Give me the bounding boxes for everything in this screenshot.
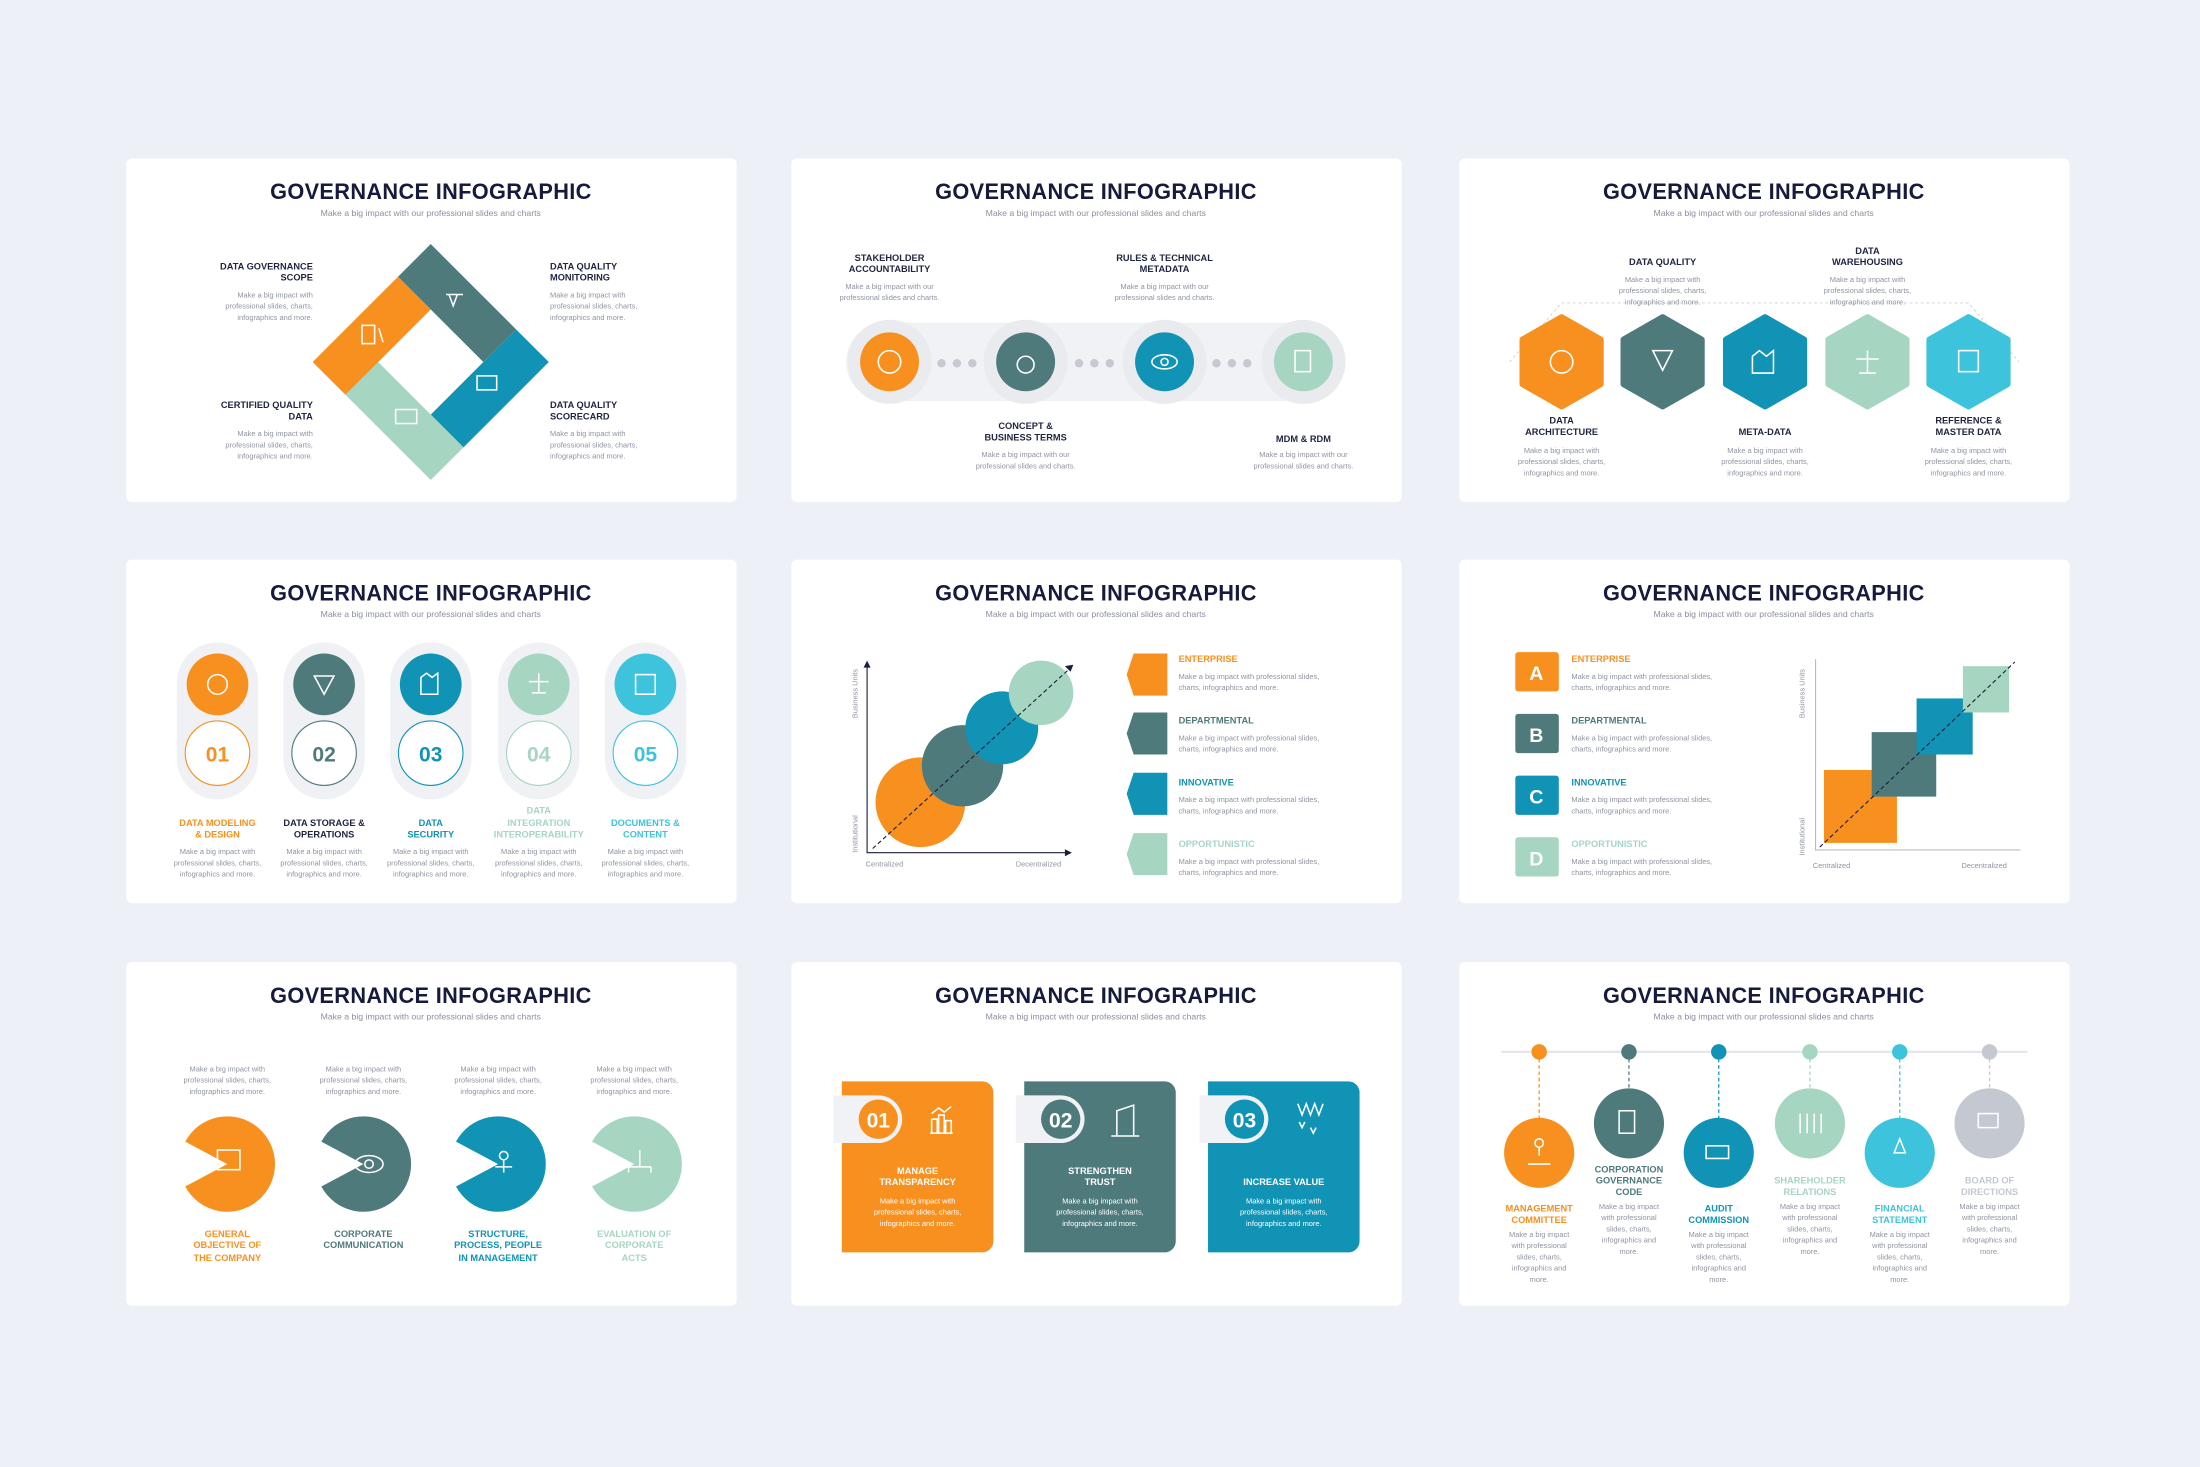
labels right: professional slides, charts, bbox=[550, 440, 637, 449]
chart: Centralized bbox=[866, 860, 903, 869]
labels: more. bbox=[1619, 1247, 1638, 1256]
panel: three cards bbox=[791, 962, 1402, 1306]
body texts bbox=[184, 1065, 678, 1096]
labels left: CERTIFIED QUALITY bbox=[221, 400, 314, 410]
labels: slides, charts, bbox=[1516, 1252, 1562, 1261]
labels: BUSINESS TERMS bbox=[985, 432, 1067, 442]
title: GOVERNANCE INFOGRAPHIC bbox=[270, 580, 592, 605]
labels: Make a big impact with bbox=[1625, 275, 1700, 284]
body texts: professional slides, charts, bbox=[454, 1076, 542, 1085]
labels right: Make a big impact with bbox=[550, 290, 626, 299]
subtitle: Make a big impact with our professional slides and charts bbox=[1654, 1012, 1874, 1022]
letter list: Make a big impact with professional slides, bbox=[1571, 795, 1712, 804]
letter list bbox=[1515, 652, 1712, 877]
labels: Make a big impact bbox=[1870, 1230, 1930, 1239]
labels: DOCUMENTS & bbox=[611, 818, 680, 828]
labels: IN MANAGEMENT bbox=[459, 1253, 538, 1263]
letter list: A bbox=[1529, 663, 1543, 685]
legend list: charts, infographics and more. bbox=[1179, 806, 1278, 815]
labels: with professional bbox=[1871, 1241, 1928, 1250]
labels: DATA bbox=[419, 818, 443, 828]
body texts: Make a big impact with bbox=[596, 1065, 672, 1073]
labels: CORPORATION bbox=[1595, 1164, 1664, 1174]
labels: professional slides and charts. bbox=[976, 461, 1076, 470]
letter list: INNOVATIVE bbox=[1571, 777, 1627, 787]
letter list: Make a big impact with professional slides, bbox=[1571, 672, 1712, 681]
pills: 04 bbox=[527, 744, 551, 767]
labels left: Make a big impact with bbox=[237, 429, 313, 438]
labels: with professional bbox=[1781, 1213, 1838, 1222]
card 02: professional slides, charts, bbox=[1056, 1208, 1144, 1217]
body texts: professional slides, charts, bbox=[184, 1076, 271, 1085]
labels: METADATA bbox=[1140, 264, 1190, 274]
subtitle: Make a big impact with our professional slides and charts bbox=[986, 1012, 1207, 1022]
card 01: MANAGE bbox=[897, 1166, 938, 1176]
pills: 03 bbox=[419, 744, 442, 767]
labels: Make a big impact with bbox=[1524, 446, 1599, 455]
hexagon row bbox=[1510, 303, 2019, 407]
letter list: charts, infographics and more. bbox=[1571, 683, 1671, 692]
card 02: Make a big impact with bbox=[1062, 1196, 1138, 1205]
labels: Make a big impact with bbox=[501, 847, 577, 856]
title: GOVERNANCE INFOGRAPHIC bbox=[1603, 179, 1925, 204]
title: GOVERNANCE INFOGRAPHIC bbox=[270, 179, 592, 204]
labels: STRUCTURE, bbox=[468, 1229, 528, 1239]
labels: Make a big impact with bbox=[286, 847, 362, 856]
labels: infographics and more. bbox=[1830, 297, 1905, 306]
labels: infographics and bbox=[1962, 1236, 2017, 1245]
labels: COMMUNICATION bbox=[323, 1240, 404, 1250]
letter list: D bbox=[1529, 848, 1543, 870]
labels: slides, charts, bbox=[1696, 1252, 1741, 1261]
labels right: Make a big impact with bbox=[550, 429, 626, 438]
labels: infographics and more. bbox=[180, 870, 255, 879]
labels: INTEROPERABILITY bbox=[494, 829, 585, 839]
body texts: professional slides, charts, bbox=[590, 1076, 678, 1085]
card 03: Make a big impact with bbox=[1246, 1196, 1322, 1205]
labels: FINANCIAL bbox=[1875, 1204, 1925, 1214]
body texts: Make a big impact with bbox=[326, 1065, 401, 1073]
panel: lettered squares chart bbox=[1459, 560, 2070, 903]
labels: DATA bbox=[527, 805, 551, 815]
labels: AUDIT bbox=[1705, 1204, 1733, 1214]
circles bbox=[185, 1116, 682, 1212]
labels: RULES & TECHNICAL bbox=[1116, 253, 1213, 263]
card 03: INCREASE VALUE bbox=[1243, 1177, 1324, 1187]
labels left: infographics and more. bbox=[237, 313, 313, 322]
legend list: charts, infographics and more. bbox=[1179, 683, 1278, 692]
labels: DATA MODELING bbox=[179, 818, 256, 828]
labels right: infographics and more. bbox=[550, 313, 626, 322]
labels bbox=[193, 1229, 672, 1263]
labels: CORPORATE bbox=[334, 1229, 393, 1239]
panel: timeline bbox=[1459, 962, 2070, 1306]
labels: MASTER DATA bbox=[1936, 427, 2002, 437]
labels: Make a big impact with bbox=[1830, 275, 1905, 284]
labels left: professional slides, charts, bbox=[225, 440, 313, 449]
labels: slides, charts, bbox=[1606, 1224, 1652, 1233]
labels: professional slides, charts, bbox=[1619, 286, 1706, 295]
labels: Make a big impact with our bbox=[845, 282, 934, 291]
labels: infographics and more. bbox=[1625, 297, 1700, 306]
letter list: charts, infographics and more. bbox=[1571, 806, 1671, 815]
labels: professional slides and charts. bbox=[840, 293, 939, 302]
labels: DATA bbox=[1855, 246, 1880, 256]
labels: META-DATA bbox=[1739, 427, 1792, 437]
labels: COMMITTEE bbox=[1511, 1215, 1567, 1225]
step squares chart bbox=[1797, 659, 2020, 870]
labels left: DATA bbox=[289, 411, 313, 421]
labels bbox=[1505, 1164, 2020, 1284]
labels: Make a big impact with our bbox=[981, 450, 1070, 459]
chart: Institutional bbox=[850, 815, 859, 853]
letter list: Make a big impact with professional slides, bbox=[1571, 734, 1712, 743]
title: GOVERNANCE INFOGRAPHIC bbox=[1603, 580, 1925, 605]
labels bbox=[1518, 246, 2012, 477]
labels: infographics and bbox=[1783, 1236, 1837, 1245]
labels: Make a big impact with bbox=[180, 847, 255, 856]
labels: slides, charts, bbox=[1967, 1224, 2012, 1233]
card 02 bbox=[1016, 1081, 1176, 1252]
labels: professional slides, charts, bbox=[280, 858, 368, 867]
subtitle: Make a big impact with our professional slides and charts bbox=[321, 1012, 542, 1022]
labels right bbox=[550, 261, 637, 461]
labels: with professional bbox=[1690, 1241, 1747, 1250]
letter list: C bbox=[1529, 787, 1543, 809]
subtitle: Make a big impact with our professional slides and charts bbox=[321, 208, 542, 218]
body texts: infographics and more. bbox=[190, 1087, 265, 1096]
labels: Make a big impact bbox=[1689, 1230, 1749, 1239]
labels right: infographics and more. bbox=[550, 452, 626, 461]
labels: Make a big impact bbox=[1599, 1202, 1659, 1211]
title: GOVERNANCE INFOGRAPHIC bbox=[270, 983, 592, 1008]
labels: infographics and bbox=[1512, 1264, 1566, 1273]
body texts: infographics and more. bbox=[326, 1087, 401, 1096]
body texts: infographics and more. bbox=[460, 1087, 536, 1096]
letter list: B bbox=[1529, 725, 1543, 747]
labels: infographics and bbox=[1602, 1236, 1656, 1245]
labels: STATEMENT bbox=[1872, 1215, 1928, 1225]
subtitle: Make a big impact with our professional slides and charts bbox=[1654, 208, 1874, 218]
labels: Make a big impact with bbox=[1931, 446, 2006, 455]
step squares chart: Institutional bbox=[1797, 818, 1806, 856]
labels: RELATIONS bbox=[1784, 1187, 1836, 1197]
card 02: STRENGTHEN bbox=[1068, 1166, 1132, 1176]
labels right: DATA QUALITY bbox=[550, 400, 618, 410]
card 01 bbox=[833, 1081, 993, 1252]
labels: EVALUATION OF bbox=[597, 1229, 672, 1239]
labels: DATA QUALITY bbox=[1629, 257, 1697, 267]
card 03: infographics and more. bbox=[1246, 1219, 1322, 1228]
subtitle: Make a big impact with our professional slides and charts bbox=[986, 208, 1207, 218]
letter list: DEPARTMENTAL bbox=[1571, 716, 1647, 726]
icons in diamond bbox=[362, 295, 497, 424]
letter list: charts, infographics and more. bbox=[1571, 868, 1671, 877]
panel: circle track bbox=[791, 158, 1402, 502]
legend list: Make a big impact with professional slides, bbox=[1179, 795, 1319, 804]
legend list: charts, infographics and more. bbox=[1179, 745, 1278, 754]
legend list: INNOVATIVE bbox=[1179, 777, 1234, 787]
labels: COMMISSION bbox=[1688, 1215, 1749, 1225]
card 03: professional slides, charts, bbox=[1240, 1208, 1328, 1217]
labels: BOARD OF bbox=[1965, 1176, 2015, 1186]
labels: with professional bbox=[1511, 1241, 1567, 1250]
card 01: TRANSPARENCY bbox=[879, 1177, 957, 1187]
labels: DATA STORAGE & bbox=[283, 818, 365, 828]
card 02: TRUST bbox=[1085, 1177, 1116, 1187]
labels: Make a big impact with our bbox=[1259, 450, 1348, 459]
title: GOVERNANCE INFOGRAPHIC bbox=[935, 179, 1257, 204]
labels: WAREHOUSING bbox=[1832, 257, 1903, 267]
labels: Make a big impact with bbox=[1727, 446, 1803, 455]
labels: Make a big impact with bbox=[608, 847, 683, 856]
body texts: infographics and more. bbox=[596, 1087, 672, 1096]
labels bbox=[174, 805, 689, 879]
labels: professional slides, charts, bbox=[495, 858, 583, 867]
card 02: 02 bbox=[1049, 1110, 1072, 1133]
labels right: professional slides, charts, bbox=[550, 302, 637, 311]
diamond chart bbox=[313, 244, 549, 480]
labels left: infographics and more. bbox=[237, 452, 313, 461]
labels: infographics and bbox=[1873, 1264, 1927, 1273]
labels: professional slides, charts, bbox=[174, 858, 261, 867]
labels: infographics and bbox=[1692, 1264, 1746, 1273]
subtitle: Make a big impact with our professional slides and charts bbox=[986, 609, 1207, 619]
legend list: Make a big impact with professional slides, bbox=[1179, 672, 1319, 681]
legend list: ENTERPRISE bbox=[1179, 654, 1238, 664]
labels right: DATA QUALITY bbox=[550, 261, 618, 271]
labels: MDM & RDM bbox=[1276, 434, 1331, 444]
labels: ARCHITECTURE bbox=[1525, 427, 1598, 437]
card 01: infographics and more. bbox=[880, 1219, 955, 1228]
labels: with professional bbox=[1961, 1213, 2018, 1222]
panel: numbered pills bbox=[126, 560, 737, 903]
labels: CODE bbox=[1616, 1187, 1642, 1197]
labels: professional slides, charts, bbox=[1721, 457, 1809, 466]
labels: with professional bbox=[1600, 1213, 1657, 1222]
pills: 02 bbox=[312, 744, 336, 767]
step squares chart: Decentralized bbox=[1961, 861, 2007, 870]
body texts: professional slides, charts, bbox=[320, 1076, 407, 1085]
card 01: Make a big impact with bbox=[880, 1196, 955, 1205]
letter list: ENTERPRISE bbox=[1571, 654, 1631, 664]
labels: ACTS bbox=[622, 1253, 647, 1263]
labels: Make a big impact bbox=[1780, 1202, 1840, 1211]
labels: INTEGRATION bbox=[507, 818, 571, 828]
legend list: DEPARTMENTAL bbox=[1179, 716, 1254, 726]
timeline bbox=[1501, 1044, 2027, 1188]
labels: DIRECTIONS bbox=[1961, 1187, 2018, 1197]
labels: SHAREHOLDER bbox=[1774, 1176, 1846, 1186]
letter list: OPPORTUNISTIC bbox=[1571, 839, 1648, 849]
pills: 05 bbox=[634, 744, 657, 767]
labels: GENERAL bbox=[205, 1229, 250, 1239]
pills bbox=[177, 642, 686, 799]
card 01: 01 bbox=[867, 1110, 890, 1133]
labels: DATA bbox=[1549, 416, 1574, 426]
labels: slides, charts, bbox=[1877, 1252, 1922, 1261]
labels: more. bbox=[1530, 1275, 1549, 1284]
legend list: OPPORTUNISTIC bbox=[1179, 839, 1255, 849]
labels left bbox=[220, 261, 314, 461]
labels: professional slides, charts, bbox=[1518, 457, 1605, 466]
labels: Make a big impact bbox=[1509, 1230, 1569, 1239]
letter list: Make a big impact with professional slides, bbox=[1571, 857, 1712, 866]
labels right: MONITORING bbox=[550, 272, 610, 282]
panel: hexagons bbox=[1459, 158, 2070, 502]
legend list: charts, infographics and more. bbox=[1179, 868, 1278, 877]
labels: OBJECTIVE OF bbox=[193, 1240, 262, 1250]
labels: infographics and more. bbox=[1524, 468, 1599, 477]
body texts: Make a big impact with bbox=[460, 1065, 536, 1073]
labels left: DATA GOVERNANCE bbox=[220, 261, 313, 271]
labels: infographics and more. bbox=[286, 870, 362, 879]
labels: professional slides and charts. bbox=[1115, 293, 1214, 302]
labels: professional slides, charts, bbox=[602, 858, 689, 867]
chart bbox=[850, 661, 1073, 869]
labels: infographics and more. bbox=[1931, 468, 2006, 477]
chart: Decentralized bbox=[1016, 860, 1061, 869]
labels: slides, charts, bbox=[1787, 1224, 1833, 1233]
labels: GOVERNANCE bbox=[1596, 1176, 1662, 1186]
labels: THE COMPANY bbox=[193, 1253, 262, 1263]
title: GOVERNANCE INFOGRAPHIC bbox=[1603, 983, 1925, 1008]
labels: infographics and more. bbox=[608, 870, 683, 879]
pills: 01 bbox=[206, 744, 229, 767]
labels: CONTENT bbox=[623, 829, 668, 839]
panel: overlapping circles chart bbox=[791, 560, 1402, 903]
panel: diamond pinwheel bbox=[126, 158, 737, 502]
legend list bbox=[1127, 654, 1319, 877]
labels: professional slides and charts. bbox=[1254, 461, 1353, 470]
labels: professional slides, charts, bbox=[1824, 286, 1911, 295]
card 01: professional slides, charts, bbox=[874, 1208, 961, 1217]
legend list: Make a big impact with professional slides, bbox=[1179, 734, 1319, 743]
labels: more. bbox=[1980, 1247, 1999, 1256]
letter list: charts, infographics and more. bbox=[1571, 745, 1671, 754]
labels left: professional slides, charts, bbox=[225, 302, 313, 311]
labels: PROCESS, PEOPLE bbox=[454, 1240, 542, 1250]
labels: CONCEPT & bbox=[998, 421, 1053, 431]
card 03 bbox=[1200, 1081, 1360, 1252]
card 03: 03 bbox=[1233, 1110, 1256, 1133]
labels: CORPORATE bbox=[605, 1240, 663, 1250]
step squares chart: Centralized bbox=[1813, 861, 1850, 870]
labels: infographics and more. bbox=[1727, 468, 1803, 477]
labels: SECURITY bbox=[407, 829, 455, 839]
labels: REFERENCE & bbox=[1935, 416, 2002, 426]
labels: Make a big impact with bbox=[393, 847, 468, 856]
panel: pacman circles bbox=[126, 962, 737, 1306]
labels: more. bbox=[1709, 1275, 1728, 1284]
labels left: Make a big impact with bbox=[237, 290, 313, 299]
labels left: SCOPE bbox=[280, 272, 313, 282]
labels: more. bbox=[1800, 1247, 1819, 1256]
labels: & DESIGN bbox=[195, 829, 240, 839]
step squares chart: Business Units bbox=[1797, 669, 1806, 718]
labels: professional slides, charts, bbox=[387, 858, 474, 867]
legend list: Make a big impact with professional slides, bbox=[1179, 857, 1319, 866]
labels: professional slides, charts, bbox=[1925, 457, 2012, 466]
labels: OPERATIONS bbox=[294, 829, 354, 839]
body texts: Make a big impact with bbox=[190, 1065, 265, 1073]
title: GOVERNANCE INFOGRAPHIC bbox=[935, 580, 1257, 605]
labels: infographics and more. bbox=[501, 870, 577, 879]
subtitle: Make a big impact with our professional slides and charts bbox=[1654, 609, 1874, 619]
labels: infographics and more. bbox=[393, 870, 468, 879]
labels bbox=[840, 253, 1353, 470]
labels: Make a big impact with our bbox=[1120, 282, 1209, 291]
labels: ACCOUNTABILITY bbox=[849, 264, 931, 274]
labels: STAKEHOLDER bbox=[855, 253, 925, 263]
chart: Business Units bbox=[850, 669, 859, 718]
title: GOVERNANCE INFOGRAPHIC bbox=[935, 983, 1257, 1008]
labels: Make a big impact bbox=[1959, 1202, 2020, 1211]
card 02: infographics and more. bbox=[1062, 1219, 1138, 1228]
labels right: SCORECARD bbox=[550, 411, 610, 421]
track bbox=[846, 320, 1346, 404]
subtitle: Make a big impact with our professional slides and charts bbox=[321, 609, 542, 619]
labels: MANAGEMENT bbox=[1505, 1204, 1573, 1214]
labels: more. bbox=[1890, 1275, 1909, 1284]
